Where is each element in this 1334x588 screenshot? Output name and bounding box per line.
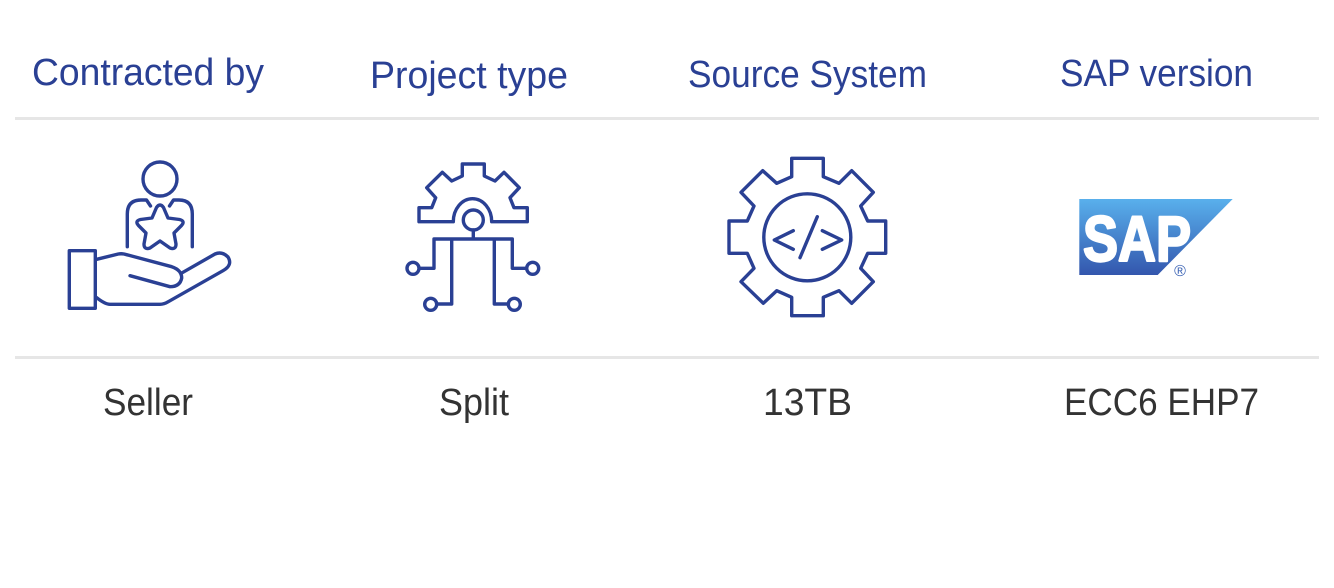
value: Split: Split	[439, 382, 509, 424]
icon: gear with code brackets	[729, 158, 886, 316]
icon: hand holding person with star	[69, 162, 230, 308]
value: Seller: Seller	[103, 382, 193, 424]
heading: Source System: Source System	[688, 54, 927, 96]
value: ECC6 EHP7: ECC6 EHP7	[1064, 382, 1259, 424]
icon: SAP logo: SAP	[1083, 203, 1191, 275]
heading: SAP version: SAP version	[1060, 53, 1253, 95]
icon: SAP logo: ®	[1174, 263, 1186, 280]
value: 13TB: 13TB	[763, 382, 852, 424]
heading: Project type: Project type	[370, 55, 568, 97]
heading: Contracted by: Contracted by	[32, 52, 264, 94]
icon: gear with circuit	[407, 164, 539, 310]
